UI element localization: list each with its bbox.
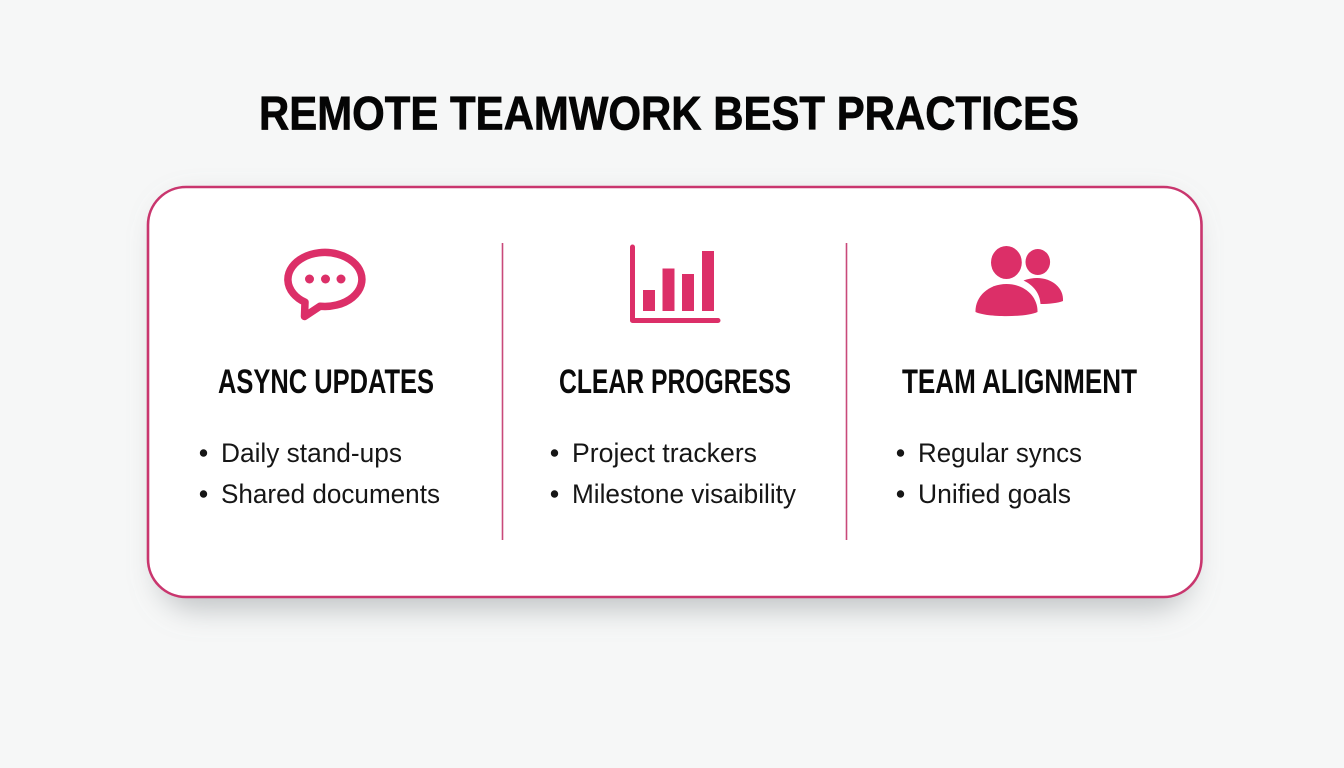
list: clear progress bullets bbox=[551, 438, 797, 509]
heading: team alignment: TEAM ALIGNMENT bbox=[902, 363, 1137, 401]
panel: best practices card bbox=[148, 187, 1202, 610]
list: team alignment bullets: Unified goals bbox=[918, 479, 1071, 509]
list: async updates bullets: Shared documents bbox=[221, 479, 440, 509]
list: clear progress bullets: Project trackers bbox=[572, 438, 757, 468]
list: team alignment bullets bbox=[897, 438, 1082, 509]
list: clear progress bullets: Milestone visaibility bbox=[572, 479, 797, 509]
list: async updates bullets bbox=[200, 438, 440, 509]
icon: two people bbox=[975, 246, 1063, 316]
panel: team alignment column bbox=[897, 246, 1137, 509]
icon: bar chart bbox=[630, 244, 720, 323]
icon: chat bubble bbox=[288, 252, 362, 316]
heading: async updates: ASYNC UPDATES bbox=[218, 363, 434, 401]
list: async updates bullets: Daily stand-ups bbox=[221, 438, 402, 468]
heading: clear progress: CLEAR PROGRESS bbox=[559, 363, 791, 401]
list: team alignment bullets: Regular syncs bbox=[918, 438, 1082, 468]
title: REMOTE TEAMWORK BEST PRACTICES bbox=[259, 86, 1079, 140]
panel: async updates column bbox=[200, 252, 440, 509]
panel: clear progress column bbox=[551, 244, 797, 509]
